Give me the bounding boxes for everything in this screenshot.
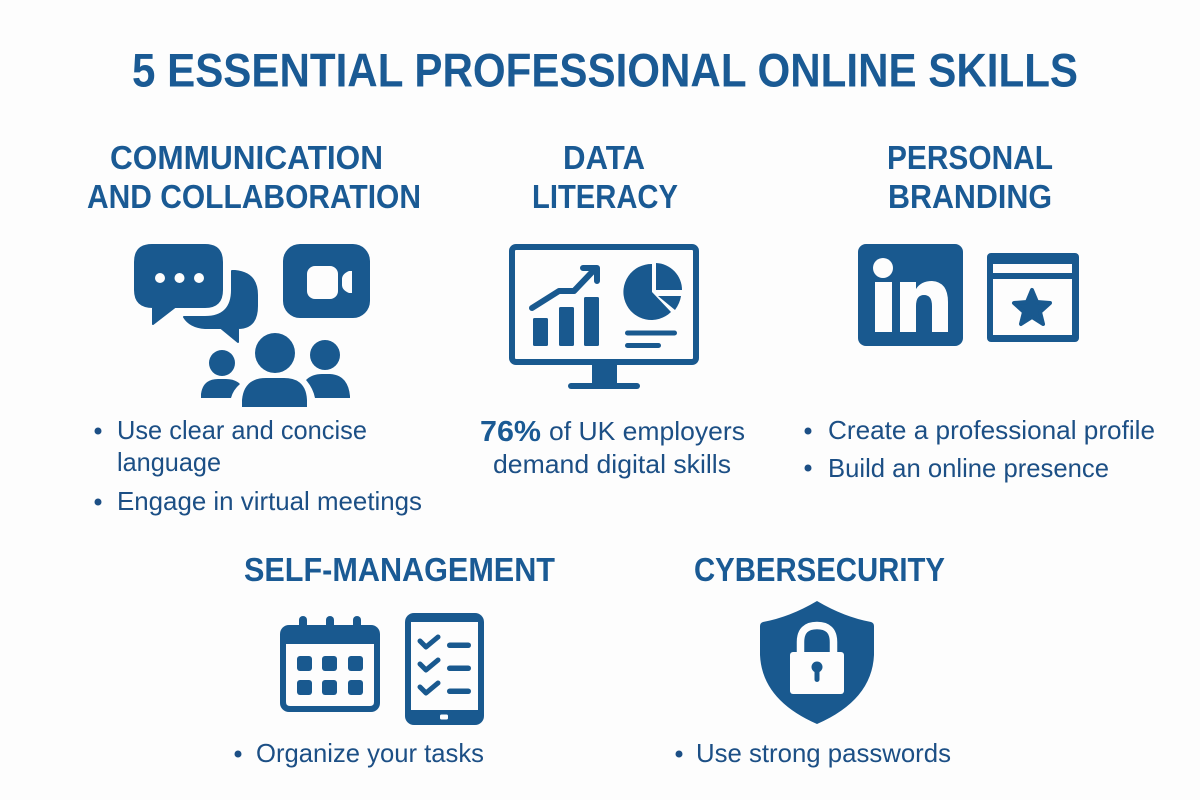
icon: shield with padlock [760, 601, 874, 724]
icon: browser window with star [987, 253, 1079, 342]
bullet list: communication tips: language [117, 447, 221, 477]
bullet list: communication tips: Use clear and concise [117, 415, 367, 445]
heading: communication and collaboration: COMMUNICATION [110, 139, 383, 176]
statistic: 76% of UK employers demand digital skills: of UK employers [549, 416, 745, 446]
icon: calendar [280, 616, 380, 712]
heading: personal branding [887, 139, 1053, 215]
bullet list: branding tips: Create a professional profile [828, 415, 1155, 445]
bullet list: branding tips: Build an online presence [828, 453, 1109, 483]
title: 5 ESSENTIAL PROFESSIONAL ONLINE SKILLS [132, 44, 1078, 96]
heading: personal branding: BRANDING [888, 178, 1052, 215]
statistic: 76% of UK employers demand digital skills [480, 416, 745, 479]
panel: communication and collaboration [87, 139, 422, 516]
heading: data literacy [532, 139, 678, 215]
bullet list: branding tips [804, 415, 1155, 483]
icon: tablet checklist [405, 613, 484, 725]
icon: chat bubbles, video call and people [135, 244, 370, 407]
panel: personal branding [804, 139, 1155, 483]
heading: cybersecurity: CYBERSECURITY [694, 551, 945, 588]
icon: LinkedIn logo [858, 244, 963, 346]
panel: cybersecurity [676, 551, 951, 768]
heading: personal branding: PERSONAL [887, 139, 1053, 176]
bullet: use strong passwords: Use strong passwords [696, 738, 951, 768]
panel: data literacy [480, 139, 745, 479]
heading: data literacy: DATA [563, 139, 645, 176]
statistic: 76% of UK employers demand digital skills: 76% [480, 416, 541, 448]
heading: communication and collaboration: AND COLLABORATION [87, 178, 421, 215]
panel: self-management [234, 551, 555, 768]
statistic: 76% of UK employers demand digital skills: demand digital skills [493, 449, 731, 479]
bullet list: communication tips [94, 415, 422, 516]
heading: data literacy: LITERACY [532, 178, 678, 215]
icon: monitor with charts [512, 247, 696, 389]
bullet: organize your tasks: Organize your tasks [256, 738, 484, 768]
bullet list: communication tips: Engage in virtual meetings [117, 486, 422, 516]
heading: communication and collaboration [87, 139, 421, 215]
heading: self-management: SELF-MANAGEMENT [244, 551, 555, 588]
